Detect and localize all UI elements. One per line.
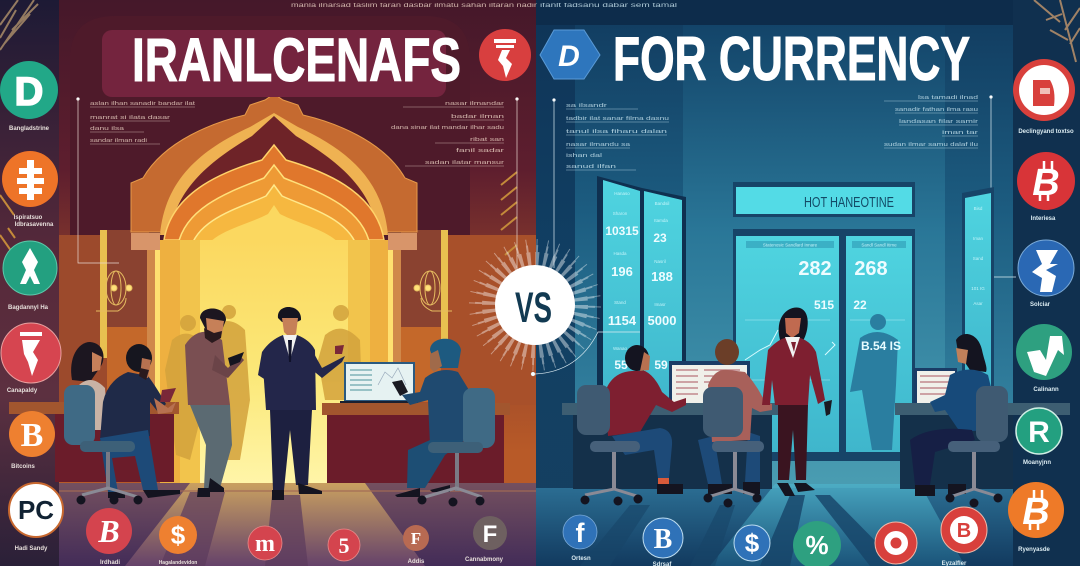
icon: blue f: [563, 515, 597, 562]
chart: right narrow screen: 101 IG: [971, 286, 985, 291]
person: seated man in red sweater: [605, 345, 686, 494]
icon: orange token: [2, 151, 58, 228]
icon: red emblem beside left title: [479, 29, 531, 81]
icon: gray glyph: Cannabmony: [465, 557, 504, 563]
chart: left display screens: 1154: [608, 313, 637, 328]
person: standing woman in maroon: [762, 307, 832, 496]
text block: left side notes, Iranian panel: danu ilsa: [90, 126, 125, 132]
bottom row icons, currency panel: [563, 507, 987, 566]
icon: orange dollar: $: [171, 520, 186, 550]
text block: left side notes, currency panel: nasar ilmandu sa: [566, 142, 631, 148]
thin connector lines around VS: [531, 332, 640, 376]
text block: right side notes, Iranian panel: badar ilman: [451, 114, 504, 120]
icon: tan glyph: F: [411, 529, 421, 548]
icon: orange B: [9, 411, 55, 470]
desks: [9, 402, 1070, 489]
icon: blue hexagon logo: [540, 30, 600, 79]
icon: red target: [875, 522, 917, 564]
icon: orange token: Ispiratsuo: [14, 215, 43, 221]
silhouette figure on screen: B.54 IS: [861, 339, 901, 353]
chart: left display screens: Itamda: [654, 218, 668, 223]
text block: right side notes, currency panel: iman tar: [942, 130, 978, 136]
text block: right side notes, Iranian panel: fanil sadar: [456, 148, 504, 154]
VS badge: VS: [515, 284, 552, 332]
icon: palm fronds top right: [1034, 0, 1080, 62]
chair: right currency desk: [946, 386, 1008, 508]
chart: central data screens: 282: [798, 258, 832, 280]
icon: orange bitcoin: Ryenyasde: [1018, 547, 1051, 553]
icon: orange token: Idbrasavenna: [15, 222, 54, 228]
text block: left side notes, Iranian panel: aslan ilhan sanadir bandar ilat: [90, 101, 196, 107]
chart: central data screens: [733, 229, 915, 461]
text block: right side notes, currency panel: sudan ilmar samu dalaf ilu: [884, 142, 978, 148]
text block: right side notes, Iranian panel: nasar ilmandar: [445, 101, 504, 107]
icon: green percent: %: [805, 530, 829, 560]
icon: tan glyph: Addis: [408, 559, 425, 565]
chart: left display screens: Imasr: [654, 302, 666, 307]
text block: right side notes, currency panel: lsa tamadi ilnad: [918, 95, 978, 101]
chair: first currency desk: [577, 385, 642, 506]
chart: left display screens: 23: [653, 231, 667, 245]
bottom row icons, Iranian panel: [86, 508, 507, 566]
chart: right narrow screen: Sand: [973, 256, 984, 261]
icon: green D: Bangladstrine: [9, 126, 50, 132]
text block: left side notes, currency panel: tadbir ilat sanar filma dasnu: [566, 116, 669, 122]
text block: left side notes, currency panel: [552, 98, 669, 268]
icon: red bitcoin: Interiesa: [1031, 216, 1056, 222]
icon: red script: Irdhadi: [100, 560, 120, 566]
left column currency icons: [0, 61, 63, 552]
chart: left display screens: Bandsil: [655, 201, 669, 206]
person: seated woman in blue: [910, 334, 994, 496]
icon: green emblem: Bagdannyl Ha: [8, 305, 49, 311]
text block: right side notes, Iranian panel: sadan ilatar mansur: [425, 160, 504, 166]
banner: HOT HANEOTINE: HOT HANEOTINE: [804, 194, 894, 211]
right column currency icons: [1008, 59, 1075, 553]
top caption strip: manla ilnarsad taslim faran dasbar ilmatu sahan iltaran nadir: [291, 3, 537, 9]
silhouette figure on screen: [850, 314, 901, 450]
icon: green check mark: [1016, 324, 1072, 393]
chart: central data screens: 268: [854, 258, 888, 280]
icon: palm fronds top left: [0, 0, 38, 50]
icon: green R: Moanyjnn: [1023, 460, 1051, 466]
icon: blue token: Solciar: [1030, 302, 1051, 308]
icon: red B: [941, 507, 987, 566]
title banner: IRANLCENAFS: IRANLCENAFS: [132, 26, 461, 94]
chart: left display screens: Stand: [614, 300, 626, 305]
banner: HOT HANEOTINE: [733, 182, 915, 217]
text block: left side notes, Iranian panel: manrat si ilata dasar: [90, 115, 170, 121]
person: hooded man at laptop: [392, 339, 472, 497]
laptop: left panel: [340, 362, 418, 403]
text block: left side notes, currency panel: tanul ilsa fiharu dalan: [566, 129, 667, 135]
icon: red bitcoin: [1017, 152, 1075, 222]
chart: left display screens: Nasril: [654, 259, 666, 264]
icon: orange bitcoin: B: [1022, 491, 1050, 533]
chart: right narrow screen: Asar: [973, 301, 983, 306]
chair: left seated man: [64, 385, 142, 504]
icon: red emblem: Canapaldy: [7, 388, 38, 394]
person: seated man in tan sweater: [698, 339, 772, 494]
chart: left display screens: Hasda: [613, 251, 627, 256]
chart: left display screens: [597, 176, 686, 420]
icon: orange dollar: [159, 516, 197, 566]
chart: left display screens: 188: [651, 269, 673, 284]
person: seated man with phone: [100, 344, 180, 498]
icon: blue hexagon logo: D: [558, 40, 580, 73]
icon: red script: [86, 508, 132, 566]
chair: right panel desk: [418, 388, 495, 506]
text block: right side notes, Iranian panel: dana sinar ilat mandar ilhar sadu: [391, 125, 504, 131]
icon: blue f: f: [576, 518, 586, 548]
icon: red white ring: Declingyand toxtso: [1018, 129, 1074, 135]
text block: left side notes, currency panel: sanud ilfan: [566, 164, 616, 170]
person: standing man in suit: [258, 307, 345, 500]
icon: green emblem: [3, 241, 57, 311]
icon: blue dollar: [734, 525, 770, 561]
icon: red m: [248, 526, 282, 560]
chart: left display screens: Sharon: [613, 211, 628, 216]
icon: tan glyph: [403, 525, 429, 565]
chart: central data screens: Statenosic Sandlard Innare: [763, 242, 818, 248]
icon: green R: [1016, 408, 1062, 466]
chart: left display screens: Wanao: [613, 346, 628, 351]
icon: blue B: B: [654, 524, 672, 555]
chart: left display screens: 10315: [605, 224, 639, 238]
icon: orange bitcoin: [1008, 482, 1064, 553]
icon: orange B: B: [21, 417, 43, 454]
chart: central data screens: Sandl Sandl Itime: [861, 242, 897, 248]
laptop: currency right desk: [914, 368, 957, 403]
icon: green D: D: [15, 70, 43, 114]
icon: blue f: Ortesn: [571, 556, 591, 562]
icon: white PC: Hadi Sandy: [15, 546, 48, 552]
icon: red emblem: [1, 323, 61, 394]
icon: gray glyph: [465, 516, 507, 563]
icon: green R: R: [1028, 416, 1050, 449]
icon: left hanging lantern: [96, 271, 132, 311]
icon: blue token: [1018, 240, 1074, 308]
icon: red script: B: [97, 513, 120, 549]
text block: left side notes, currency panel: sa ilsandr: [566, 103, 607, 109]
panel: currency side background: [536, 0, 1080, 566]
icon: orange dollar: Hagalandevidon: [159, 560, 197, 566]
VS badge: [495, 265, 575, 345]
chart: left display screens: 5000: [648, 313, 676, 328]
text block: right side notes, currency panel: sanadir fathan ilma rasu: [895, 107, 978, 113]
chart: left display screens: 196: [611, 264, 633, 279]
icon: red m: m: [255, 531, 275, 557]
icon: white PC: PC: [18, 495, 54, 525]
chart: right narrow screen: [962, 187, 994, 405]
icon: red glyph: [328, 529, 360, 561]
top caption strip: ifanlt fadsanu dabar sem tamal: [540, 3, 677, 9]
chart: left display screens: Hanaso: [614, 191, 630, 196]
shadow figures on the glowing wall: [165, 305, 362, 460]
icon: green check mark: Calinann: [1033, 387, 1059, 393]
laptop: currency left desk: [669, 361, 750, 403]
icon: green D: [0, 61, 58, 132]
text block: left side notes, Iranian panel: [76, 97, 196, 263]
icon: green percent: [793, 521, 841, 566]
icon: red bitcoin: B: [1032, 162, 1060, 204]
decorative gold stripes: [0, 172, 517, 255]
text block: right side notes, Iranian panel: ribat san: [470, 137, 504, 143]
chart: right narrow screen: Iman: [973, 236, 983, 241]
panel: Iranian side background: [0, 0, 536, 566]
icon: red B: B: [957, 520, 971, 542]
chair: second currency desk: [703, 387, 764, 508]
text block: right side notes, currency panel: landasan filar samir: [899, 119, 978, 125]
chart: central data screens: 515: [814, 298, 834, 312]
text block: left side notes, currency panel: ishan dal: [566, 153, 602, 159]
icon: blue B: [643, 518, 683, 566]
chart: left display screens: 55: [614, 358, 628, 372]
title banner: IRANLCENAFS: [102, 26, 461, 97]
text block: right side notes, currency panel: [884, 95, 1016, 277]
icon: red white ring: [1013, 59, 1075, 135]
icon: orange B: Bitcoins: [11, 464, 35, 470]
person: standing man in hoodie: [185, 308, 244, 497]
text block: left side notes, Iranian panel: sandar ilman radi: [90, 138, 147, 144]
text block: right side notes, Iranian panel: [391, 97, 519, 268]
illustration: glowing arch: [131, 94, 417, 483]
icon: right hanging lantern: [414, 271, 452, 311]
chart: left display screens: 59: [654, 358, 668, 372]
person: seated woman: [71, 342, 108, 430]
icon: gray glyph: F: [483, 521, 497, 548]
burst behind VS badge: [472, 242, 598, 368]
icon: blue dollar: $: [745, 528, 760, 558]
icon: red glyph: 5: [338, 533, 350, 558]
chart: central data screens: 22: [853, 298, 867, 312]
top caption strip: [291, 3, 677, 9]
chart: right narrow screen: Bisd: [974, 206, 983, 211]
icon: white PC: [9, 483, 63, 552]
